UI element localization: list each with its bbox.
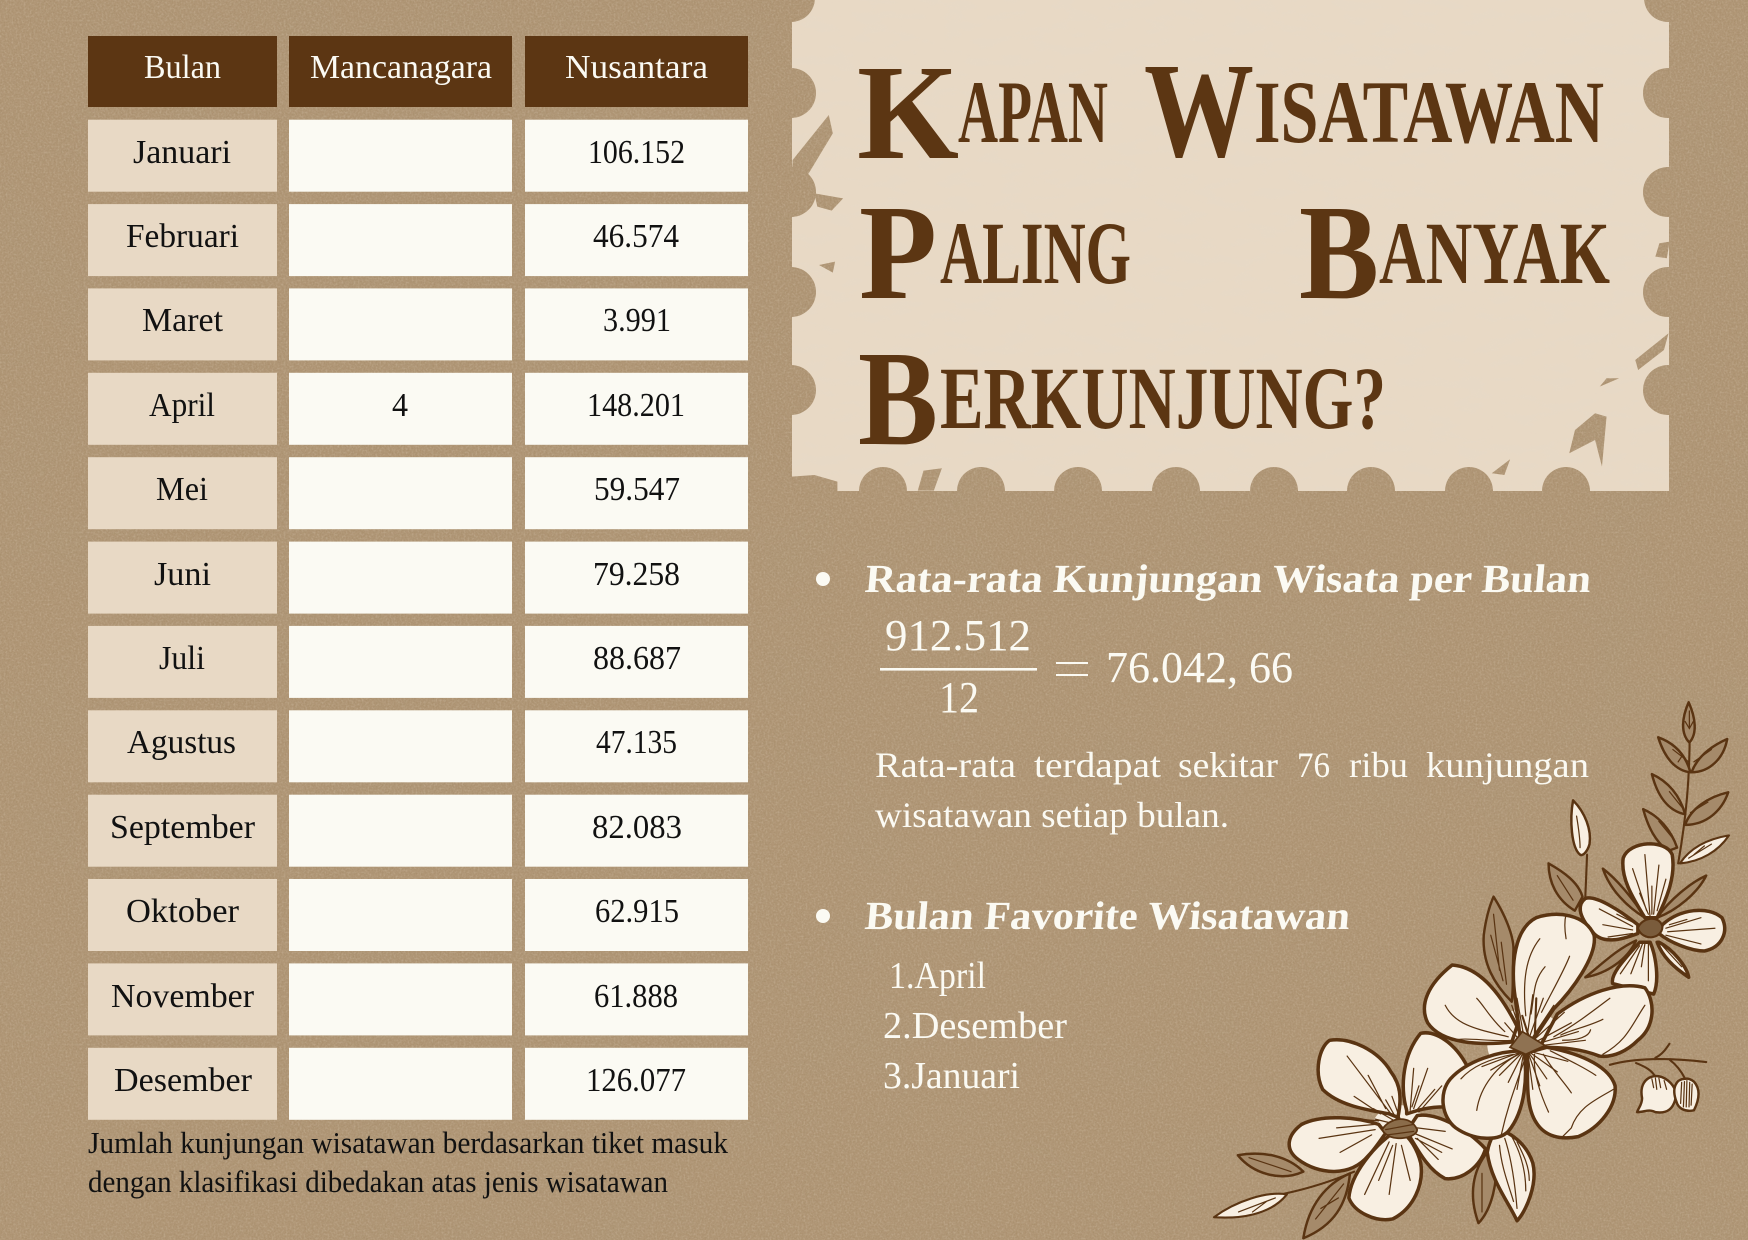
row: Januari: 106.152 bbox=[588, 134, 685, 171]
row: Juli: Juli bbox=[159, 640, 205, 677]
row: Juli bbox=[88, 626, 748, 698]
explanation text: ribu bbox=[1349, 745, 1408, 785]
row: September: September bbox=[110, 809, 256, 846]
row: Mei: 59.547 bbox=[594, 471, 680, 508]
row: Oktober bbox=[88, 879, 748, 951]
row: Januari bbox=[88, 120, 748, 192]
row: Mei: Mei bbox=[156, 471, 208, 508]
title: ANYAK bbox=[1379, 205, 1610, 303]
row: Februari bbox=[88, 204, 748, 276]
row: September bbox=[88, 795, 748, 867]
row: September: 82.083 bbox=[592, 809, 682, 846]
title: B bbox=[1299, 178, 1379, 328]
row: Juni: 79.258 bbox=[593, 556, 680, 593]
formula: 12 bbox=[939, 673, 979, 722]
row: April bbox=[88, 373, 748, 445]
formula: 912.512 bbox=[885, 611, 1031, 660]
ranked list: 1.April bbox=[889, 955, 986, 997]
ranked list bbox=[883, 955, 1067, 1097]
row: Maret bbox=[88, 288, 748, 360]
panel: title stamp bbox=[792, 0, 1669, 491]
explanation text: kunjungan bbox=[1426, 745, 1589, 785]
row: Juni bbox=[88, 542, 748, 614]
row: April: 4 bbox=[392, 387, 408, 424]
bell buds bbox=[1637, 1076, 1699, 1113]
row: Desember: 126.077 bbox=[586, 1062, 686, 1099]
title: W bbox=[1144, 36, 1254, 186]
explanation text bbox=[875, 745, 1589, 835]
title: P bbox=[859, 178, 937, 328]
lower-left sprig bbox=[1214, 1154, 1354, 1238]
row: Desember bbox=[88, 1048, 748, 1120]
illustration: flowers bbox=[1214, 702, 1729, 1238]
heading: Rata-rata Kunjungan Wisata per Bulan bbox=[863, 556, 1593, 601]
row: Oktober: Oktober bbox=[126, 893, 240, 930]
row: November: 61.888 bbox=[594, 978, 678, 1015]
table header row: Mancanagara bbox=[310, 49, 492, 86]
title: B bbox=[858, 324, 938, 474]
explanation text: terdapat bbox=[1034, 745, 1161, 785]
explanation text: sekitar bbox=[1178, 745, 1278, 785]
lower leaves bbox=[1473, 1044, 1706, 1223]
row: Maret: 3.991 bbox=[603, 302, 671, 339]
explanation text: 76 bbox=[1297, 745, 1330, 785]
stamp shape bbox=[792, 0, 1669, 491]
table header row: Bulan bbox=[144, 49, 221, 86]
row: Oktober: 62.915 bbox=[595, 893, 679, 930]
upper sprig bbox=[1643, 702, 1729, 863]
large centre flower bbox=[1424, 914, 1652, 1138]
top-right flower bbox=[1580, 844, 1725, 994]
footnote text: Jumlah kunjungan wisatawan berdasarkan tiket masuk bbox=[88, 1125, 728, 1160]
bullet bbox=[816, 909, 830, 923]
table header row: Nusantara bbox=[565, 49, 708, 86]
row: Januari: Januari bbox=[133, 134, 231, 171]
bullet bbox=[816, 572, 830, 586]
row: Februari: Februari bbox=[126, 218, 239, 255]
title: K bbox=[857, 38, 959, 188]
title: ERKUNJUNG? bbox=[940, 350, 1386, 448]
formula: 76.042, 66 bbox=[1106, 643, 1293, 692]
leaf behind large flower bbox=[1484, 897, 1514, 1002]
section: average visits per month bbox=[816, 556, 1593, 835]
title bbox=[857, 36, 1610, 474]
row: November bbox=[88, 963, 748, 1035]
title: ISATAWAN bbox=[1254, 64, 1604, 162]
ranked list: 2.Desember bbox=[883, 1005, 1067, 1047]
footnote text bbox=[88, 1125, 728, 1199]
explanation text: wisatawan setiap bulan. bbox=[875, 795, 1229, 835]
table header row bbox=[88, 36, 748, 107]
ranked list: 3.Januari bbox=[883, 1055, 1020, 1097]
title: ALING bbox=[940, 205, 1131, 303]
row: Mei bbox=[88, 457, 748, 529]
footnote text: dengan klasifikasi dibedakan atas jenis wisatawan bbox=[88, 1164, 668, 1199]
row: November: November bbox=[111, 978, 255, 1015]
lower-left flower bbox=[1289, 1033, 1485, 1220]
bud and stalk bbox=[1549, 800, 1590, 911]
formula bbox=[880, 611, 1293, 722]
title: APAN bbox=[958, 64, 1108, 162]
row: Juli: 88.687 bbox=[593, 640, 681, 677]
section: favourite months bbox=[816, 893, 1352, 1097]
row: Maret: Maret bbox=[142, 302, 224, 339]
row: Februari: 46.574 bbox=[593, 218, 679, 255]
row: April: April bbox=[149, 387, 215, 424]
row: Desember: Desember bbox=[114, 1062, 253, 1099]
row: April: 148.201 bbox=[587, 387, 685, 424]
row: Agustus: 47.135 bbox=[596, 724, 677, 761]
row: Juni: Juni bbox=[154, 556, 211, 593]
row: Agustus: Agustus bbox=[127, 724, 236, 761]
panel: data table bbox=[88, 36, 748, 1120]
heading: Bulan Favorite Wisatawan bbox=[863, 893, 1352, 938]
row: Agustus bbox=[88, 710, 748, 782]
explanation text: Rata-rata bbox=[875, 745, 1016, 785]
